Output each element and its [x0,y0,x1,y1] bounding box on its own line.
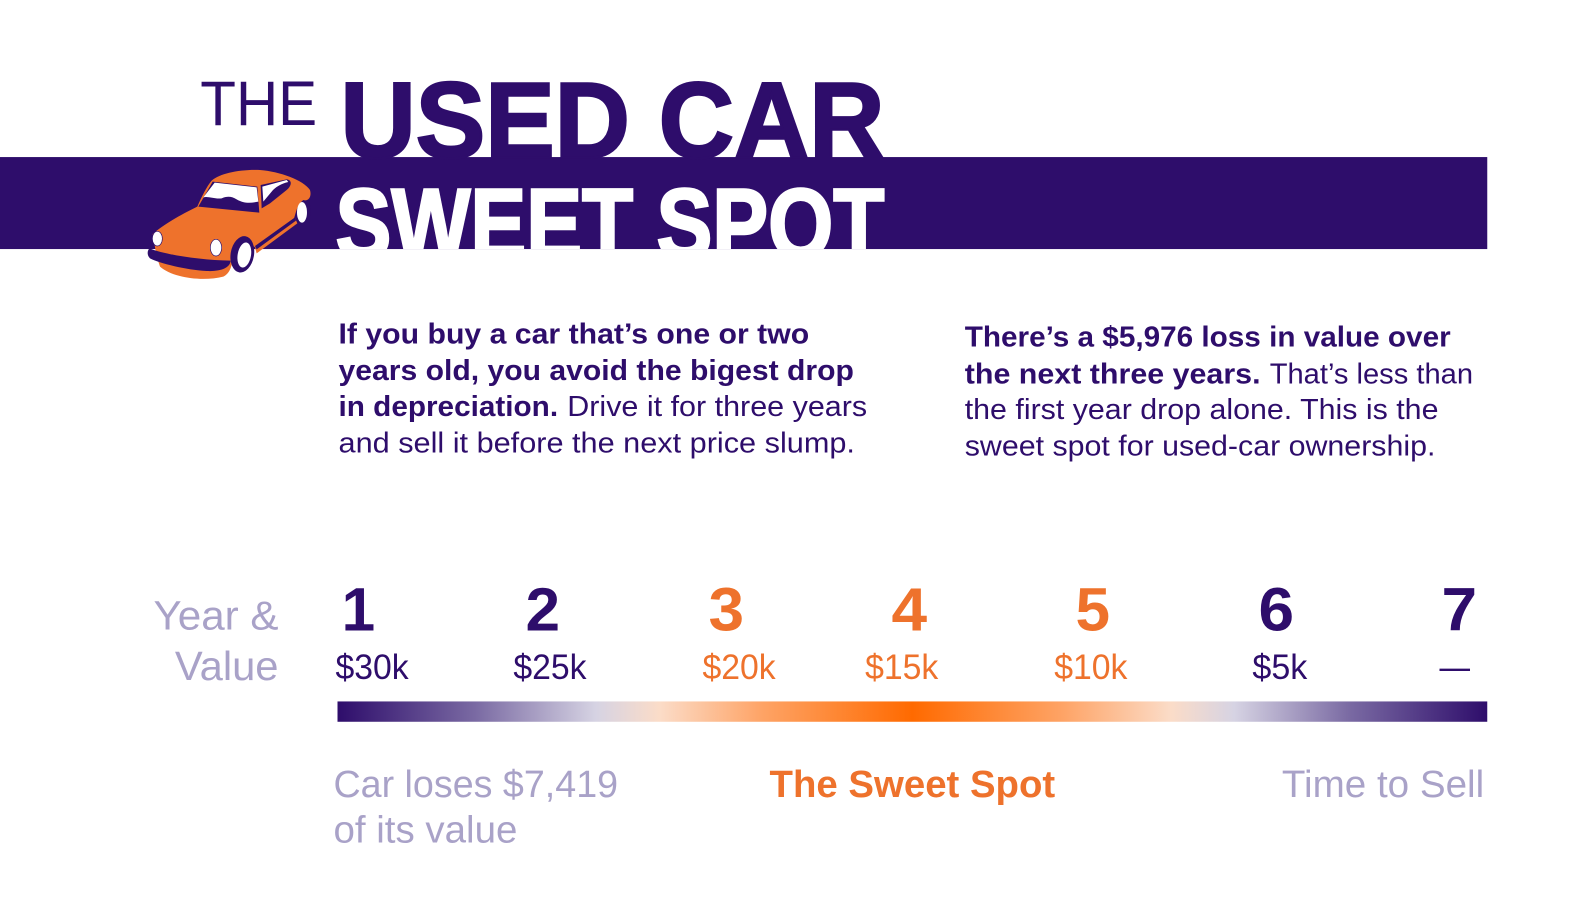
dollar values [335,647,1470,687]
year numbers: 4 [892,575,927,643]
year numbers: 1 [342,575,375,643]
caption: car loses value: Car loses $7,419 [333,763,618,805]
text block: left paragraph: years old, you avoid the bigest drop [339,355,854,387]
year numbers: 6 [1259,575,1294,643]
text block: left paragraph: and sell it before the next price slump. [339,427,855,459]
gradient timeline bar [338,701,1487,722]
caption: the sweet spot: The Sweet Spot [770,763,1056,805]
title: THE [200,69,317,139]
dollar values: — [1439,647,1470,687]
dollar values: $5k [1252,647,1308,687]
caption: car loses value [333,763,618,851]
title: USED CAR [341,60,884,181]
year numbers: 5 [1076,575,1110,643]
year numbers: 7 [1442,575,1477,643]
row label: year and value: Year & [154,592,279,638]
caption: time to sell: Time to Sell [1282,763,1484,805]
title: banner bar [0,157,1487,249]
row label: year and value [154,592,279,689]
text block: left paragraph [339,319,867,459]
dollar values: $15k [865,647,938,687]
text block: left paragraph: in depreciation. [339,391,558,423]
title [202,80,885,249]
dollar values: $25k [513,647,587,687]
row label: year and value: Value [175,643,279,689]
dollar values: $10k [1054,647,1128,687]
dollar values: $20k [702,647,776,687]
text block: right paragraph: the next three years. [965,358,1261,390]
year numbers: 2 [526,575,560,643]
text block: right paragraph: There’s a $5,976 loss in value over [965,322,1451,354]
year numbers: 3 [709,575,744,643]
caption: car loses value: of its value [333,809,517,851]
text block: right paragraph: sweet spot for used-car ownership. [965,430,1435,462]
text block: right paragraph: That’s less than [1270,358,1473,390]
dollar values: $30k [335,647,409,687]
icon: orange car [148,170,311,279]
text block: left paragraph: Drive it for three years [567,391,867,423]
text block: right paragraph: the first year drop alone. This is the [965,394,1438,426]
year numbers [342,575,1477,643]
title: SWEET SPOT [335,169,884,280]
text block: left paragraph: If you buy a car that’s one or two [339,319,809,351]
text block: right paragraph [965,322,1473,462]
